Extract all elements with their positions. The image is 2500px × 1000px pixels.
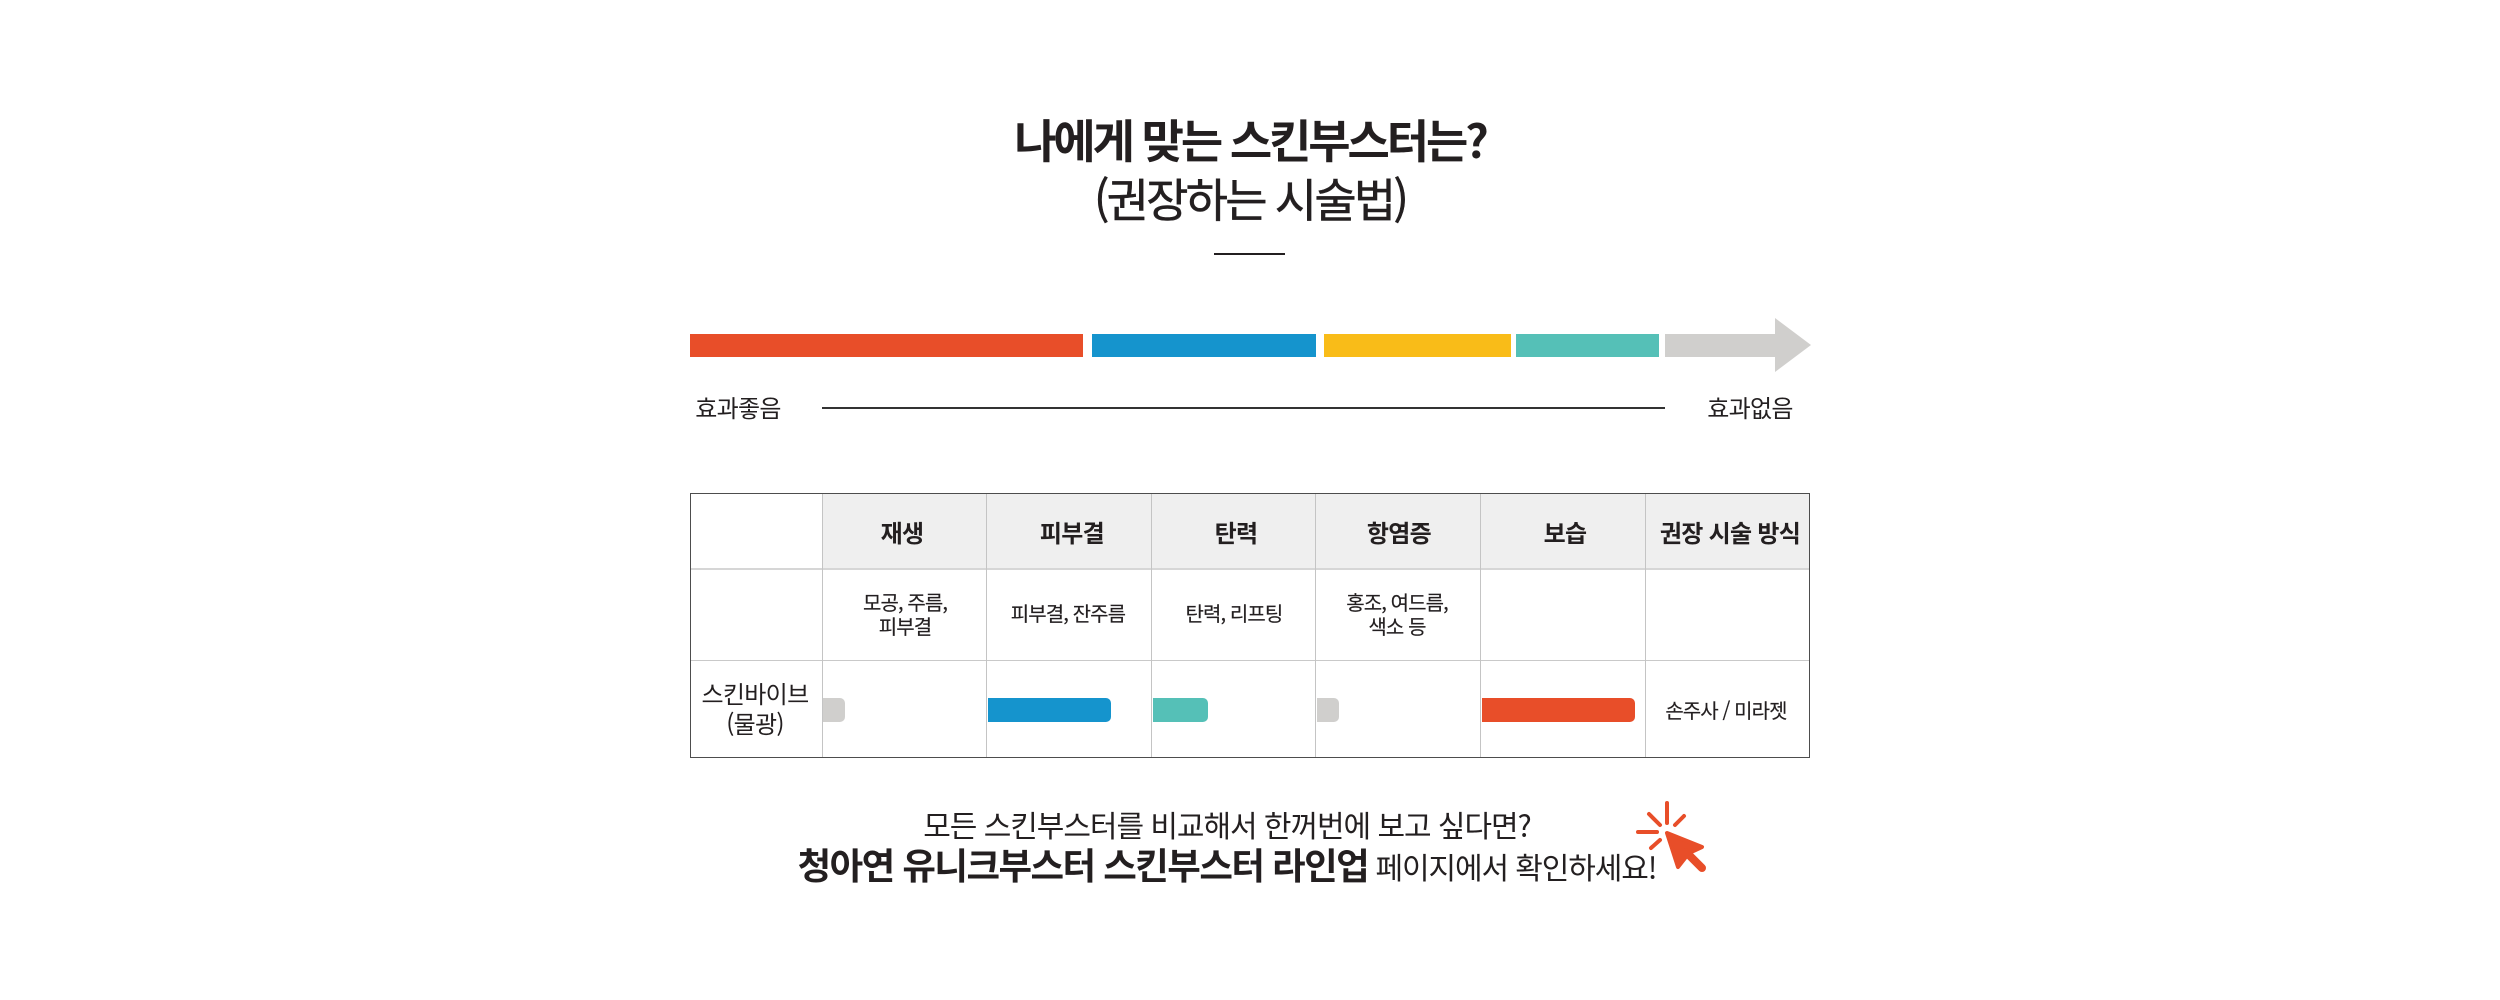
comparison table [690,493,1810,758]
header: 항염증: 항염증 [1367,514,1431,549]
header: 재생: 재생 [881,514,923,549]
scale line [822,407,1665,409]
segment: teal [1516,334,1659,357]
segment: gray arrow [1665,318,1811,372]
label: good effect: 효과좋음 [695,389,781,424]
segment: yellow [1324,334,1511,357]
description: 항염증: 홍조, 여드름, [1346,587,1448,616]
bar: 보습 [1482,698,1635,722]
icon: click cursor [1636,801,1706,872]
effect scale arrow [690,318,1811,372]
header: 보습: 보습 [1544,514,1586,549]
title: 나에게 맞는 스킨부스터는? [1014,106,1486,172]
bar: 항염증 [1317,698,1339,722]
description: 항염증: 색소 등 [1368,611,1426,640]
bar: 탄력 [1153,698,1208,722]
footer line 1: 모든 스킨부스터를 비교해서 한꺼번에 보고 싶다면? [923,802,1531,846]
description: 탄력: 탄력, 리프팅 [1186,598,1282,627]
row label [702,675,808,740]
segment: blue [1092,334,1316,357]
description: 재생 [863,587,947,640]
method text: 손주사 / 미라젯 [1665,695,1787,724]
bar: 재생 [823,698,845,722]
description: 피부결: 피부결, 잔주름 [1011,598,1125,627]
description: 재생: 피부결 [879,611,931,640]
title [1014,106,1486,231]
header: 탄력: 탄력 [1215,514,1257,549]
label: no effect: 효과없음 [1707,389,1793,424]
bar: 피부결 [988,698,1111,722]
title divider [1214,253,1285,255]
footer line 2: 청아연 유니크부스터 스킨부스터 라인업 페이지에서 확인하세요! [798,837,1656,890]
description: 항염증 [1346,587,1448,640]
header: 피부결: 피부결 [1040,514,1104,549]
segment: red [690,334,1083,357]
header: 권장 시술 방식: 권장 시술 방식 [1660,514,1800,549]
description: 재생: 모공, 주름, [863,587,947,616]
row label: (물광) [726,705,784,740]
table outline [690,493,1810,758]
header background [822,493,1810,569]
row label: 스킨바이브 [702,675,808,710]
title: (권장하는 시술법) [1094,165,1406,231]
